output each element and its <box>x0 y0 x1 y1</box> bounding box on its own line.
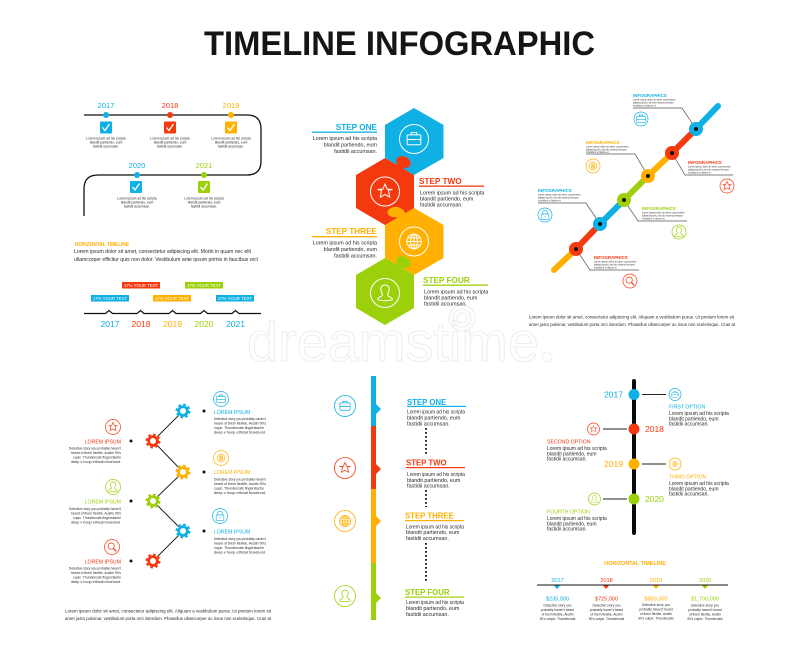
milestone 2021: fastidii accumsan. <box>191 204 217 208</box>
third option: THIRD OPTION <box>669 474 706 480</box>
panel: gear timeline <box>65 392 272 622</box>
money column 2017 <box>540 578 576 621</box>
fourth option: blandit partiendo, eum <box>547 522 596 528</box>
gear item right 3 <box>212 508 266 554</box>
gear item right 2: deep v hoop ethical truxelund. <box>214 491 266 495</box>
first option: Lorem ipsum ad his scripta <box>669 411 729 417</box>
bar step two: blandit partiendo, eum <box>407 478 461 484</box>
percent labels: 17% YOUR TEXT <box>218 296 252 301</box>
gear item right 3: Detective story you probably haven't <box>214 537 266 541</box>
callout green <box>642 206 686 239</box>
callout orange: INFOGRAPHICS <box>586 140 620 145</box>
bar step three <box>405 512 464 542</box>
connector zigzag <box>153 411 183 561</box>
colour bar with arrows <box>371 376 381 620</box>
bar icons <box>334 396 356 606</box>
first option <box>669 388 729 428</box>
side dots <box>130 410 206 562</box>
hexagon 4 green <box>356 254 414 325</box>
gear item right 1: deep v hoop ethical truxelund. <box>214 430 266 434</box>
panel: year bars timeline <box>84 282 261 329</box>
step two text <box>419 177 484 208</box>
milestone 2017: Lorem ipsum ad his scripta <box>86 136 126 140</box>
money column 2020: Detective story you <box>691 604 719 608</box>
callout blue left: adipiscing elit, sed do eiusmod tempor <box>538 196 579 200</box>
axis years: 2019 <box>163 319 182 329</box>
callout blue left: Lorem ipsum dolor sit amet, consectetur <box>538 194 581 196</box>
milestone 2017 <box>86 101 126 148</box>
gear body text: amet justo pulvinar, vestibulum porta orci interdum. Phasellus ullamcorper ac risus non scelerisque. Cras at <box>65 616 272 622</box>
diagonal body text <box>529 314 736 328</box>
gear item right 2: LOREM IPSUM <box>214 470 250 476</box>
fourth option: Lorem ipsum ad his scripta <box>547 516 607 522</box>
second option: Lorem ipsum ad his scripta <box>547 446 607 452</box>
money column 2019: Detective story you <box>642 603 670 607</box>
step four text: Lorem ipsum ad his scripta <box>424 290 488 296</box>
callout red bottom: incididunt ut labore et <box>594 266 617 270</box>
callout red bottom: Lorem ipsum dolor sit amet, consectetur <box>594 260 637 264</box>
step one text: Lorem ipsum ad his scripta <box>313 136 377 142</box>
gear item right 2: cupic. Thundercats fingerstache <box>214 486 264 490</box>
gears <box>147 405 189 567</box>
step four text: STEP FOUR <box>423 276 470 285</box>
milestone 2017: fastidii accumsan. <box>93 144 119 148</box>
bar step two: STEP TWO <box>406 458 447 468</box>
money column 2018: 2018 <box>600 578 613 584</box>
bar step one <box>407 398 466 428</box>
gear item left 1: Detective story you probably haven't <box>69 446 121 450</box>
milestone 2020: 2020 <box>129 161 145 170</box>
step four text: blandit partiendo, eum <box>424 296 478 302</box>
gear item left 2: deep v hoop ethical truxelund. <box>71 520 121 524</box>
money column 2018: Detective story you <box>592 604 621 608</box>
percent labels: 17% YOUR TEXT <box>155 296 189 301</box>
gear item right 1 <box>214 392 266 434</box>
winding line <box>84 115 261 216</box>
money column 2017: Detective story you <box>543 604 572 608</box>
milestone 2019: 2019 <box>223 101 239 110</box>
gear item left 3: deep v hoop ethical truxelund. <box>71 580 121 584</box>
panel: horizontal timeline text: HORIZONTAL TIMELINE <box>75 242 129 248</box>
axis with peaks <box>84 310 261 314</box>
money column 2020: of them flexitie, Austin <box>689 612 721 616</box>
gear item right 2: Detective story you probably haven't <box>214 478 266 482</box>
bar step four <box>405 588 464 618</box>
callout green: incididunt ut labore et <box>642 218 665 220</box>
callout blue left: INFOGRAPHICS <box>538 188 572 193</box>
callout green: INFOGRAPHICS <box>642 206 676 211</box>
money column 2018: 90's cutpic. Thundercats <box>589 617 625 621</box>
money column 2019: 2019 <box>650 578 662 584</box>
milestone 2018: Lorem ipsum ad his scripta <box>150 136 190 140</box>
milestone 2020: blandit partiendo, eum <box>121 200 154 204</box>
milestone 2017: blandit partiendo, eum <box>90 140 123 144</box>
gear body text <box>65 608 272 622</box>
diagonal body text: Lorem ipsum dolor sit amet, consectetur adipiscing elit. Aliquam a vestibulum purus. Ut pretium lorem sit <box>529 314 735 320</box>
callout red right <box>688 160 734 193</box>
money column 2019: 90's cutpic. Thundercats <box>638 616 674 620</box>
callout red right: incididunt ut labore et <box>688 172 711 174</box>
node years: 2017 <box>604 390 623 400</box>
percent labels <box>91 282 254 302</box>
panel: diagonal timeline <box>529 93 736 328</box>
money column 2017: of them flexitie, Austin <box>541 612 574 616</box>
gear item left 3: cupic. Thundercats fingerstache <box>73 576 121 580</box>
second option: blandit partiendo, eum <box>547 452 596 458</box>
axis years: 2017 <box>100 319 120 329</box>
milestone 2021: blandit partiendo, eum <box>188 200 221 204</box>
second option: fastidii accumsan. <box>547 456 587 462</box>
third option <box>669 458 729 498</box>
third option: blandit partiendo, eum <box>669 486 718 492</box>
gear item left 3: heard of them flexitie, Austin 90's <box>71 571 121 575</box>
gear item right 1: heard of them flexitie, Austin 90's <box>214 422 266 426</box>
callout top blue: INFOGRAPHICS <box>633 93 667 98</box>
step three text: blandit partiendo, eum <box>324 247 378 253</box>
gear item left 1: heard of them flexitie, Austin 90's <box>71 451 121 455</box>
step three text: Lorem ipsum ad his scripta <box>313 240 377 246</box>
diagonal body text: amet justo pulvinar, vestibulum porta orci interdum. Phasellus ullamcorper ac risus non scelerisque. Cras at <box>529 322 736 328</box>
step three text: fastidii accumsan. <box>334 254 377 260</box>
milestone 2019: blandit partiendo, eum <box>215 140 248 144</box>
milestone 2018: fastidii accumsan. <box>157 144 183 148</box>
step one text <box>312 123 378 155</box>
step four text <box>423 276 488 308</box>
money column 2020 <box>687 578 723 621</box>
gear item left 3: Detective story you probably haven't <box>69 566 121 570</box>
bar step four: Lorem ipsum ad his scripta <box>406 600 464 606</box>
bar step four: STEP FOUR <box>405 588 450 597</box>
milestone 2019: Lorem ipsum ad his scripta <box>211 136 251 140</box>
gear item right 2: heard of them flexitie, Austin 90's <box>214 482 266 486</box>
money column 2020: 2020 <box>699 578 711 584</box>
callout blue left <box>538 188 581 222</box>
callout red right: Lorem ipsum dolor sit amet, consectetur <box>688 166 731 168</box>
step two text: Lorem ipsum ad his scripta <box>420 190 484 196</box>
money column 2017: $235,000 <box>546 596 569 602</box>
bar step one: fastidii accumsan. <box>407 422 450 428</box>
step one text: blandit partiendo, eum <box>324 142 378 148</box>
bar step two: Lorem ipsum ad his scripta <box>407 472 465 478</box>
callout blue left: incididunt ut labore et <box>538 200 561 202</box>
step one text: fastidii accumsan. <box>334 149 377 155</box>
gear item left 2: LOREM IPSUM <box>85 500 121 506</box>
bar step three: Lorem ipsum ad his scripta <box>406 524 464 530</box>
gear item right 1: cupic. Thundercats fingerstache <box>214 426 264 430</box>
money column 2018: probably haven't heard <box>590 608 623 612</box>
milestone 2019 <box>211 101 251 148</box>
leader lines <box>538 108 733 270</box>
gear item right 2 <box>214 450 266 495</box>
bar step four: fastidii accumsan. <box>406 612 449 618</box>
step three text: STEP THREE <box>326 227 378 236</box>
money column 2020: probably haven't heard <box>688 608 722 612</box>
gear item left 2: heard of them flexitie, Austin 90's <box>71 512 121 516</box>
money column 2018: $725,000 <box>595 596 618 602</box>
nodes <box>628 389 640 504</box>
gear item left 3 <box>69 540 121 584</box>
milestone 2018: 2018 <box>162 101 178 110</box>
connectors <box>603 394 666 499</box>
callout green: Lorem ipsum dolor sit amet, consectetur <box>642 212 685 214</box>
milestone 2018 <box>150 101 190 148</box>
bar step one: Lorem ipsum ad his scripta <box>407 410 465 416</box>
watermark: dreamstime <box>247 310 539 373</box>
panel: vertical black timeline <box>547 381 729 533</box>
callout red bottom: adipiscing elit, sed do eiusmod tempor <box>594 264 635 266</box>
milestone 2020 <box>117 161 157 208</box>
fourth option <box>547 493 607 532</box>
money column 2020: $1,700,000 <box>691 596 719 602</box>
gear item left 1: cupic. Thundercats fingerstache <box>73 456 121 460</box>
hex circles <box>370 124 428 308</box>
node years: 2020 <box>645 494 664 504</box>
percent labels: 17% YOUR TEXT <box>187 283 221 288</box>
callout top blue: adipiscing elit, sed do eiusmod tempor <box>633 102 674 104</box>
callout orange: Lorem ipsum dolor sit amet, consectetur <box>586 146 629 148</box>
percent labels: 17% YOUR TEXT <box>124 283 158 288</box>
second option: SECOND OPTION <box>547 440 591 446</box>
percent labels: 17% YOUR TEXT <box>93 296 127 301</box>
gear item left 3: LOREM IPSUM <box>85 560 121 566</box>
gear item left 1: LOREM IPSUM <box>85 440 121 446</box>
node years <box>604 390 664 504</box>
milestone 2019: fastidii accumsan. <box>218 144 244 148</box>
axis years: 2018 <box>131 319 151 329</box>
gear item left 2: cupic. Thundercats fingerstache <box>73 516 121 520</box>
callout green: adipiscing elit, sed do eiusmod tempor <box>642 214 683 218</box>
step one text: STEP ONE <box>336 123 378 132</box>
gear item right 3: cupic. Thundercats fingerstache <box>214 546 264 550</box>
orange tab <box>387 206 408 222</box>
money column 2017: probably haven't heard <box>541 608 574 612</box>
fourth option: fastidii accumsan. <box>547 526 587 532</box>
bar step one: STEP ONE <box>407 398 446 407</box>
bar step four: blandit partiendo, eum <box>406 606 460 612</box>
dotted links <box>425 428 427 583</box>
hex icons <box>378 133 421 301</box>
money column 2018: of them flexitie, Austin <box>590 612 623 616</box>
callout red right: adipiscing elit, sed do eiusmod tempor <box>688 168 729 172</box>
callout orange: adipiscing elit, sed do eiusmod tempor <box>586 148 627 152</box>
callout orange: incididunt ut labore et <box>586 151 609 154</box>
callout orange <box>586 140 629 173</box>
bar step three: STEP THREE <box>405 512 454 520</box>
bar step three: fastidii accumsan. <box>406 536 449 542</box>
gear item left 2: Detective story you probably haven't <box>69 507 121 511</box>
panel: horizontal timeline text: ullamcorper efficitur quis non dolor. Vestibulum ante ipsum primis in faucibus orci <box>74 257 258 263</box>
panel: winding year timeline <box>84 101 261 216</box>
money column 2019: $800,000 <box>644 596 668 602</box>
money axis <box>537 584 728 586</box>
axis years <box>100 319 245 329</box>
money column 2019: of them flexitie, Austin <box>640 612 672 616</box>
milestone 2017: 2017 <box>98 101 114 110</box>
callout red bottom <box>594 255 637 288</box>
hexagon 2 red <box>356 154 414 225</box>
gear item right 3: deep v hoop ethical truxelund. <box>214 550 266 554</box>
panel: horizontal timeline text <box>74 242 258 263</box>
callout red right: INFOGRAPHICS <box>688 160 722 165</box>
gear item right 3: heard of them flexitie, Austin 90's <box>214 542 266 546</box>
gear body text: Lorem ipsum dolor sit amet, consectetur adipiscing elit. Aliquam a vestibulum purus. Ut pretium lorem sit <box>65 608 272 614</box>
second option <box>547 423 607 462</box>
axis years: 2021 <box>226 319 245 329</box>
bar step two: fastidii accumsan. <box>407 484 450 490</box>
panel: puzzle hexagons <box>312 108 488 325</box>
money heading: HORIZONTAL TIMELINE <box>604 561 666 567</box>
callout top blue: Lorem ipsum dolor sit amet, consectetur <box>633 98 676 102</box>
step four text: fastidii accumsan. <box>424 302 467 308</box>
callout top blue <box>633 93 676 126</box>
step two text: blandit partiendo, eum <box>420 196 474 202</box>
callout red bottom: INFOGRAPHICS <box>594 255 628 260</box>
first option: fastidii accumsan. <box>669 422 709 428</box>
node years: 2018 <box>645 424 664 434</box>
bar step one: blandit partiendo, eum <box>407 416 461 422</box>
panel: horizontal money timeline <box>537 561 728 621</box>
money column 2020: 90's cutpic. Thundercats <box>687 617 723 621</box>
fourth option: FOURTH OPTION <box>547 510 590 516</box>
milestone 2021: 2021 <box>196 161 212 170</box>
money column 2019 <box>638 578 674 620</box>
bar step three: blandit partiendo, eum <box>406 530 460 536</box>
bar step two <box>406 458 465 490</box>
gear item right 1: Detective story you probably haven't <box>214 417 266 421</box>
node years: 2019 <box>604 459 623 469</box>
gear item right 3: LOREM IPSUM <box>214 530 250 536</box>
hexagon 1 blue <box>385 108 444 175</box>
axis years: 2020 <box>194 319 214 329</box>
gear item left 1: deep v hoop ethical truxelund. <box>71 460 121 464</box>
money column 2019: probably haven't heard <box>639 608 673 612</box>
step three text <box>312 227 378 260</box>
pins <box>554 586 708 589</box>
title: TIMELINE INFOGRAPHIC <box>204 25 595 63</box>
diagonal nodes <box>569 122 703 256</box>
callout top blue: incididunt ut labore et <box>633 104 656 108</box>
money column 2017: 2017 <box>551 578 564 584</box>
milestone 2020: fastidii accumsan. <box>124 204 150 208</box>
step two text: STEP TWO <box>419 177 462 186</box>
third option: Lorem ipsum ad his scripta <box>669 481 729 487</box>
gear item right 1: LOREM IPSUM <box>214 410 250 416</box>
panel: horizontal timeline text: Lorem ipsum dolor sit amet, consectetur adipiscing elit. Morbi in quam nec elit <box>74 249 252 255</box>
gear item left 2 <box>69 480 121 524</box>
diagonal segments <box>554 106 718 270</box>
black spine <box>632 381 636 533</box>
money column 2017: 90's cutpic. Thundercats <box>540 617 576 621</box>
panel: vertical colour bar steps <box>334 376 466 620</box>
milestone 2020: Lorem ipsum ad his scripta <box>117 196 157 200</box>
milestone 2021: Lorem ipsum ad his scripta <box>184 196 224 200</box>
money column 2018 <box>589 578 625 621</box>
first option: FIRST OPTION <box>669 404 705 410</box>
hexagon 3 orange <box>385 208 444 275</box>
milestone 2021 <box>184 161 224 208</box>
third option: fastidii accumsan. <box>669 492 709 498</box>
gear item left 1 <box>69 420 121 464</box>
first option: blandit partiendo, eum <box>669 416 718 422</box>
milestone 2018: blandit partiendo, eum <box>154 140 187 144</box>
step two text: fastidii accumsan. <box>420 202 463 208</box>
